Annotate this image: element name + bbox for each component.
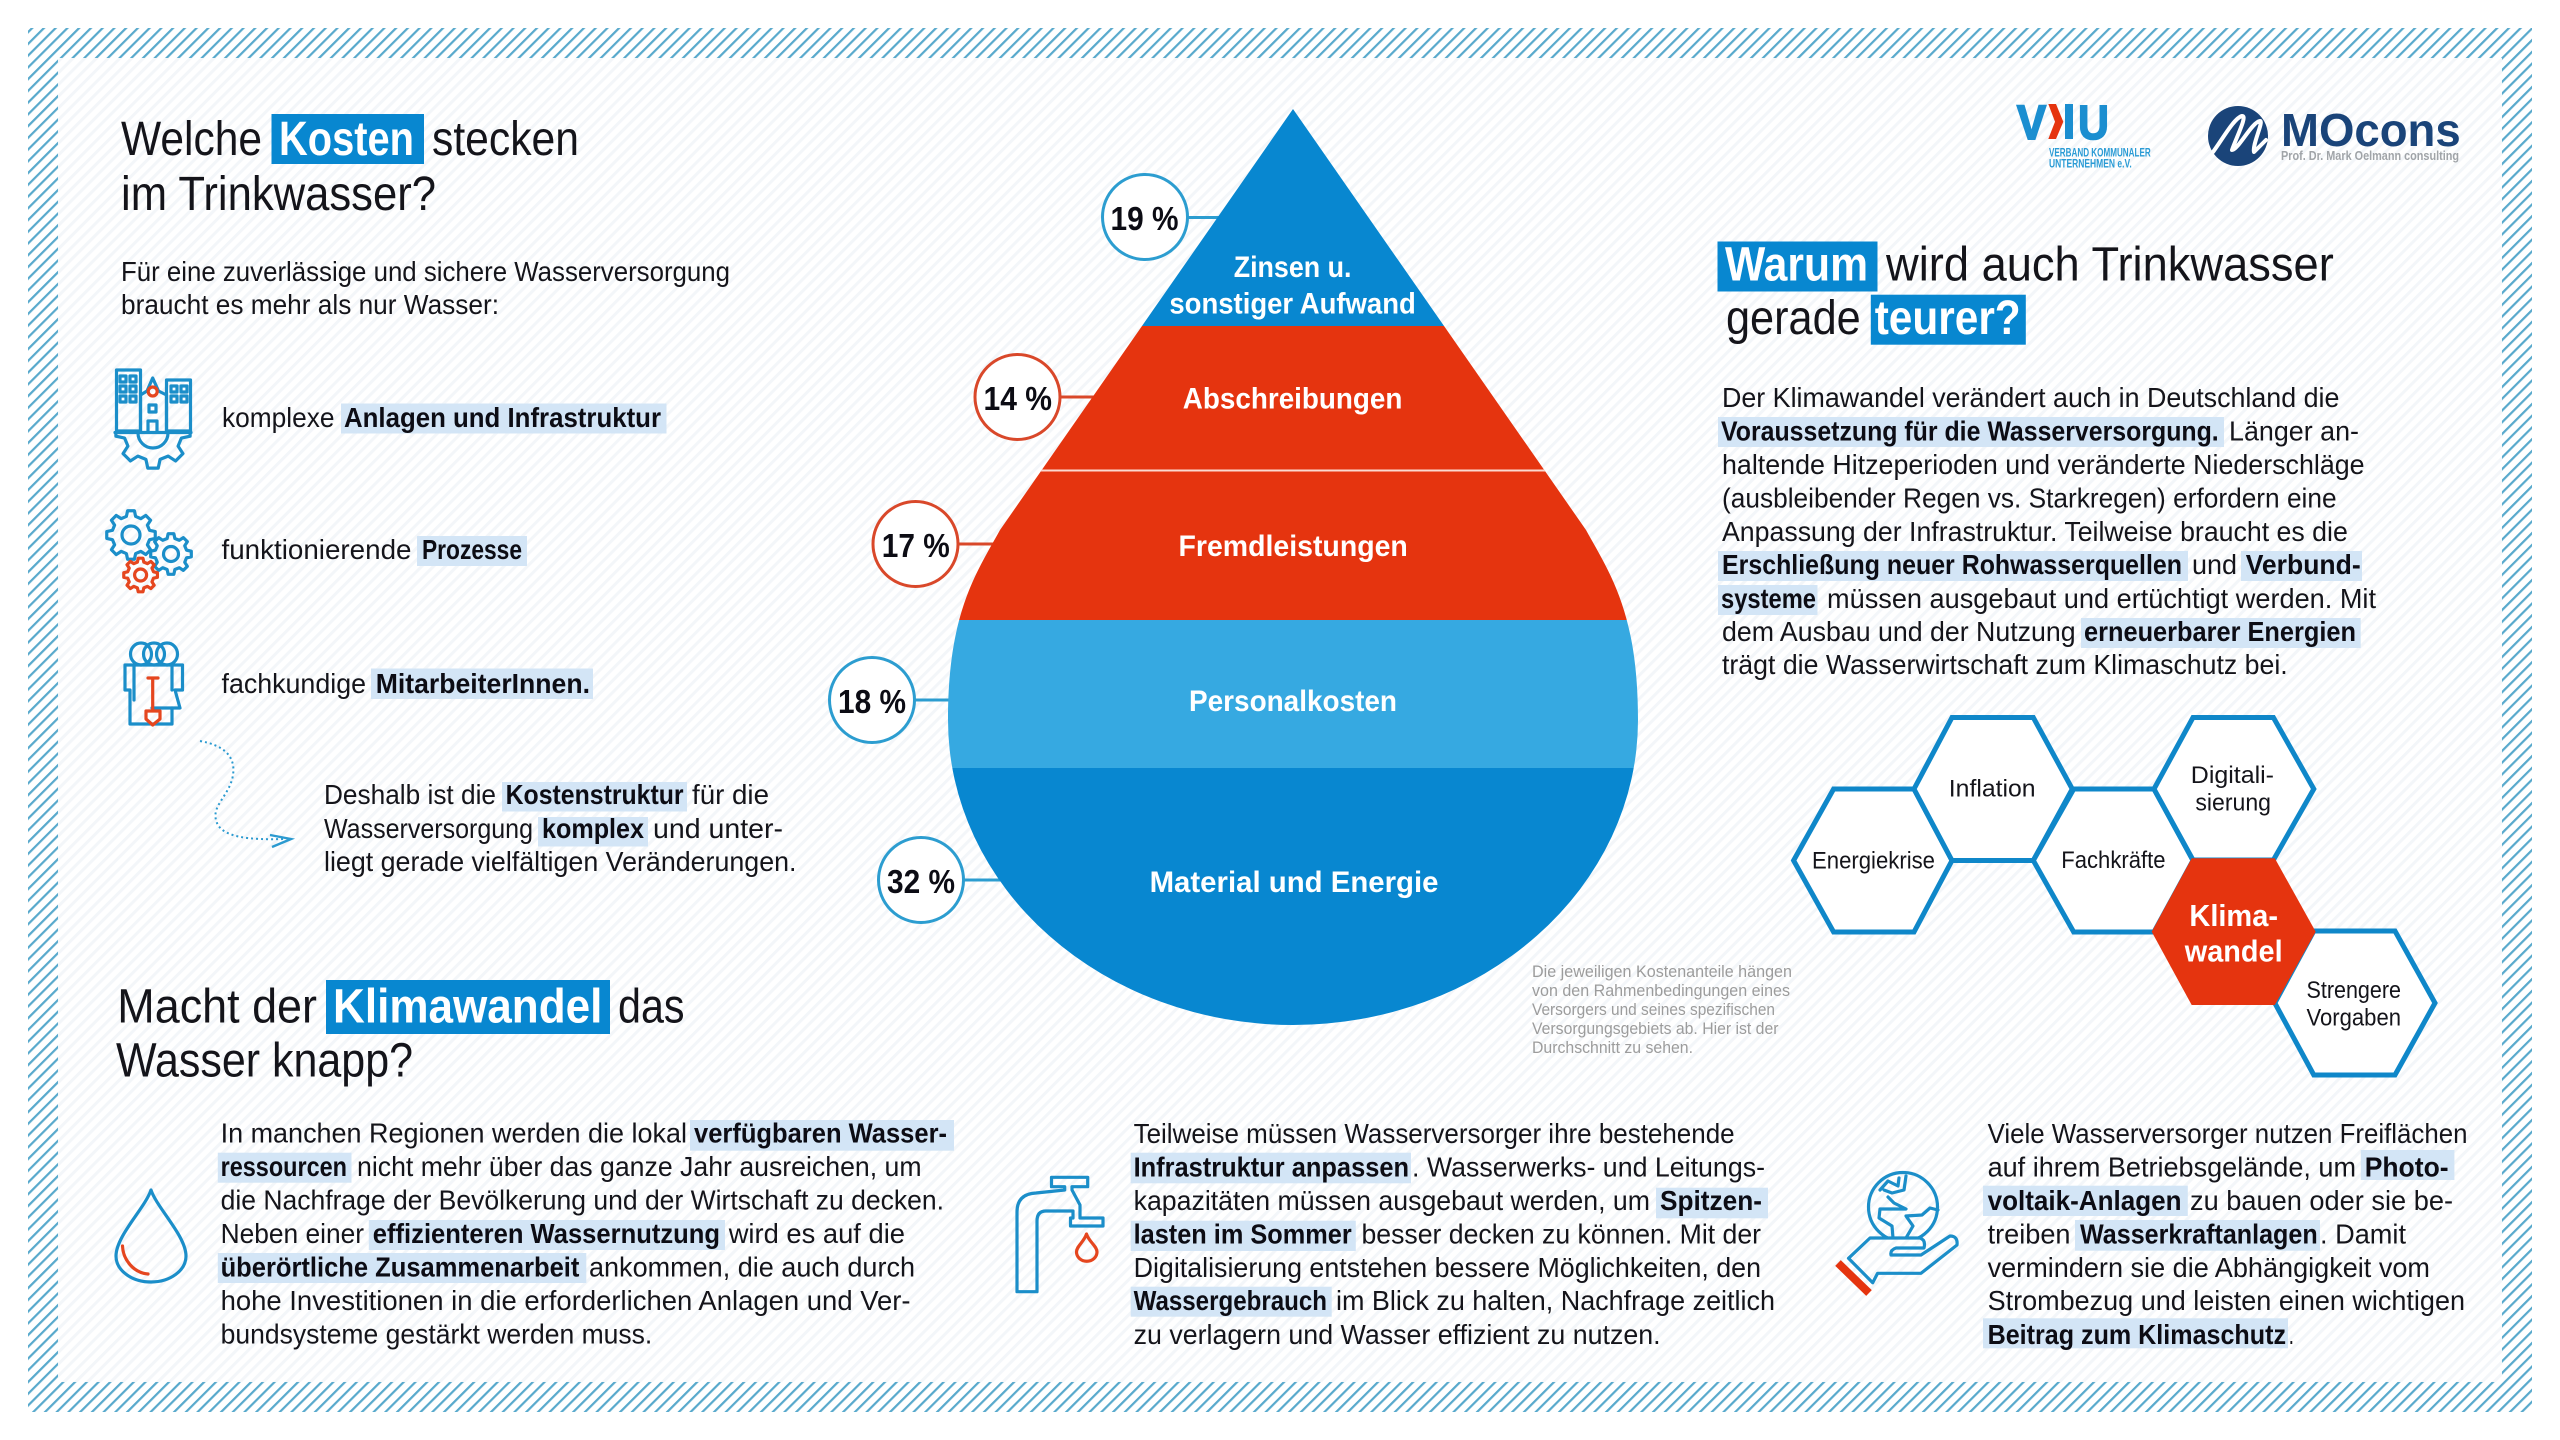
logo: VKU: VERBAND KOMMUNALER <box>2049 148 2151 160</box>
text: Infrastruktur anpassen: kapazitäten müssen ausgebaut werden, um <box>1134 1185 1650 1216</box>
text: regionale Wasserressourcen: bundsysteme gestärkt werden muss. <box>221 1318 652 1350</box>
text: Infrastruktur anpassen: Infrastruktur anpassen <box>1134 1152 1409 1182</box>
text: regionale Wasserressourcen: nicht mehr über das ganze Jahr ausreichen, um <box>357 1151 922 1182</box>
text: Deshalb ist die Kostenstruktur: und unter- <box>653 813 783 844</box>
text: regionale Wasserressourcen: verfügbaren Wasser- <box>694 1118 947 1149</box>
footnote: von den Rahmenbedingungen eines <box>1532 982 1790 1000</box>
icon: water tap <box>1017 1177 1103 1292</box>
text: Freiflächen und Photovoltaik: Photo- <box>2365 1152 2449 1182</box>
text: Klimawandel in Deutschland: trägt die Wasserwirtschaft zum Klimaschutz bei. <box>1722 649 2288 680</box>
text: Freiflächen und Photovoltaik: Viele Wasserversorger nutzen Freiflächen <box>1988 1118 2468 1149</box>
title: Welche Kosten stecken: Welche <box>121 113 262 166</box>
connector lines <box>915 218 1230 880</box>
footnote <box>1532 963 1792 1057</box>
logo: VKU: U <box>2078 97 2109 150</box>
percentage: 18: 18 % <box>838 683 906 720</box>
text: Klimawandel in Deutschland: und <box>2192 549 2237 580</box>
title: Macht der Klimawandel das Wasser knapp: Klimawandel <box>333 981 602 1034</box>
text: Infrastruktur anpassen: zu verlagern und Wasser effizient zu nutzen. <box>1134 1319 1661 1350</box>
icon: buildings on gear <box>115 370 191 468</box>
title: Macht der Klimawandel das Wasser knapp: Wasser knapp? <box>116 1035 413 1088</box>
text: Klimawandel in Deutschland: haltende Hitzeperioden und veränderte Niederschläge <box>1722 449 2365 480</box>
hexagon: Energiekrise: Energiekrise <box>1812 847 1935 874</box>
text: regionale Wasserressourcen: ressourcen <box>221 1151 347 1182</box>
text: Deshalb ist die Kostenstruktur: Deshalb ist die <box>324 779 496 810</box>
hexagon: Inflation <box>1914 718 2072 860</box>
text: Klimawandel in Deutschland: Erschließung neuer Rohwasserquellen <box>1722 549 2182 580</box>
hexagon: Digitalisierung <box>2154 718 2314 860</box>
text: Deshalb ist die Kostenstruktur: Wasserversorgung <box>324 813 533 844</box>
text: regionale Wasserressourcen: Neben einer <box>221 1218 364 1249</box>
percentage: 19 <box>1102 174 1188 260</box>
label: Zinsen: sonstiger Aufwand <box>1169 288 1416 320</box>
title: Warum wird auch Trinkwasser: teurer? <box>1875 292 2021 345</box>
footnote: Versorgungsgebiets ab. Hier ist der <box>1532 1020 1779 1038</box>
text: Freiflächen und Photovoltaik: Wasserkraftanlagen <box>2080 1218 2318 1250</box>
percentage: 17 <box>873 502 958 586</box>
hexagon: Digitalisierung: sierung <box>2195 790 2271 817</box>
text: Freiflächen und Photovoltaik: auf ihrem Betriebsgelände, um <box>1988 1152 2356 1182</box>
title: Welche Kosten stecken: im Trinkwasser? <box>121 168 436 221</box>
item text: Anlagen und Infrastruktur: Anlagen und Infrastruktur <box>344 402 661 433</box>
text: regionale Wasserressourcen: In manchen Regionen werden die lokal <box>221 1118 687 1149</box>
text: Freiflächen und Photovoltaik: vermindern sie die Abhängigkeit vom <box>1988 1252 2430 1283</box>
text: Freiflächen und Photovoltaik: treiben <box>1988 1218 2070 1250</box>
label: Material und Energie: Material und Energie <box>1150 866 1438 899</box>
percentage: 19: 19 % <box>1110 200 1178 237</box>
text: Klimawandel in Deutschland: Länger an- <box>2229 416 2359 446</box>
text: regionale Wasserressourcen: überörtliche Zusammenarbeit <box>221 1252 579 1282</box>
hexagon: Klimawandel <box>2152 858 2316 1005</box>
title: Warum wird auch Trinkwasser <box>1718 238 2334 345</box>
text: regionale Wasserressourcen: wird es auf die <box>728 1218 905 1249</box>
text: Infrastruktur anpassen: im Blick zu halten, Nachfrage zeitlich <box>1336 1285 1775 1316</box>
arrow: dotted curve <box>200 741 291 847</box>
text: Deshalb ist die Kostenstruktur <box>324 779 796 877</box>
footnote: Die jeweiligen Kostenanteile hängen <box>1532 963 1792 981</box>
icon: gears <box>107 511 191 592</box>
title: Welche Kosten stecken <box>121 113 579 221</box>
intro text <box>121 256 730 320</box>
item text: Anlagen und Infrastruktur: komplexe <box>222 402 334 433</box>
intro text: braucht es mehr als nur Wasser: <box>121 289 499 320</box>
text: Infrastruktur anpassen: besser decken zu können. Mit der <box>1362 1218 1761 1250</box>
text: Klimawandel in Deutschland: müssen ausgebaut und ertüchtigt werden. Mit <box>1827 583 2376 614</box>
percentage: 32 <box>878 838 964 922</box>
title: Welche Kosten stecken: stecken <box>432 113 579 166</box>
hexagon: Klimawandel: wandel <box>2184 934 2283 969</box>
icon: globe in hand <box>1838 1172 1957 1293</box>
text: Freiflächen und Photovoltaik: voltaik-Anlagen <box>1988 1185 2182 1216</box>
item text: Prozesse: Prozesse <box>422 534 522 565</box>
intro text: Für eine zuverlässige und sichere Wasserversorgung <box>121 256 730 287</box>
icon: water drop <box>116 1190 186 1282</box>
percentage: 32: 32 % <box>887 863 955 900</box>
text: regionale Wasserressourcen: ankommen, die auch durch <box>589 1252 915 1282</box>
hexagon: Fachkräfte <box>2033 789 2193 932</box>
label: Zinsen <box>1169 251 1416 320</box>
percentage: 14: 14 % <box>984 380 1052 417</box>
item text: MitarbeiterInnen: fachkundige <box>222 668 366 699</box>
text: Deshalb ist die Kostenstruktur: komplex <box>542 813 644 844</box>
text: regionale Wasserressourcen: effizienteren Wassernutzung <box>373 1218 720 1249</box>
text: Infrastruktur anpassen: Teilweise müssen Wasserversorger ihre bestehende <box>1134 1118 1735 1149</box>
text: Klimawandel in Deutschland: Anpassung der Infrastruktur. Teilweise braucht es die <box>1722 516 2348 547</box>
hexagon: Inflation: Inflation <box>1949 776 2036 803</box>
label: Personalkosten: Personalkosten <box>1189 685 1397 718</box>
item text: Anlagen und Infrastruktur <box>222 402 666 434</box>
label: Zinsen: Zinsen u. <box>1234 251 1352 284</box>
title: Warum wird auch Trinkwasser: wird auch Trinkwasser <box>1885 238 2334 292</box>
text: Klimawandel in Deutschland: (ausbleibender Regen vs. Starkregen) erfordern eine <box>1722 482 2337 514</box>
text: Infrastruktur anpassen: Wassergebrauch <box>1134 1285 1327 1316</box>
text: regionale Wasserressourcen: hohe Investitionen in die erforderlichen Anlagen und Ver- <box>221 1285 911 1316</box>
icon: staff with shovel <box>125 643 182 725</box>
hexagon: Klimawandel: Klima- <box>2189 898 2278 933</box>
text: Freiflächen und Photovoltaik: . <box>2289 1319 2294 1350</box>
item text: MitarbeiterInnen: MitarbeiterInnen. <box>376 668 590 699</box>
text: Infrastruktur anpassen: lasten im Sommer <box>1134 1218 1352 1250</box>
logo: VKU <box>2017 97 2151 171</box>
text: regionale Wasserressourcen <box>218 1118 954 1350</box>
item text: Prozesse: funktionierende <box>222 534 412 565</box>
text: Freiflächen und Photovoltaik: Beitrag zum Klimaschutz <box>1988 1319 2286 1350</box>
text: Deshalb ist die Kostenstruktur: Kostenstruktur <box>506 779 684 810</box>
text: Freiflächen und Photovoltaik: . Damit <box>2320 1218 2406 1250</box>
text: Klimawandel in Deutschland <box>1718 382 2376 680</box>
hexagon: Strengere Vorgaben: Strengere <box>2306 977 2401 1004</box>
label: Abschreibungen: Abschreibungen <box>1183 382 1402 416</box>
label: Fremdleistungen: Fremdleistungen <box>1178 530 1408 563</box>
hexagon: Energiekrise <box>1794 789 1952 932</box>
hexagon: Strengere Vorgaben: Vorgaben <box>2306 1005 2401 1032</box>
hexagon: Strengere Vorgaben <box>2275 931 2435 1075</box>
item text: Prozesse <box>222 534 527 566</box>
title: Macht der Klimawandel das Wasser knapp <box>116 980 684 1088</box>
text: Deshalb ist die Kostenstruktur: für die <box>692 779 769 810</box>
text: Freiflächen und Photovoltaik <box>1983 1118 2468 1350</box>
hexagon: Digitalisierung: Digitali- <box>2191 762 2274 789</box>
logo: MOcons <box>2208 104 2461 166</box>
text: Infrastruktur anpassen: . Wasserwerks- und Leitungs- <box>1412 1152 1765 1182</box>
logo: VKU: V <box>2017 97 2046 150</box>
text: Infrastruktur anpassen: Digitalisierung entstehen bessere Möglichkeiten, den <box>1134 1252 1761 1283</box>
text: Freiflächen und Photovoltaik: zu bauen oder sie be- <box>2190 1185 2453 1216</box>
percentage: 18 <box>830 658 914 742</box>
text: regionale Wasserressourcen: die Nachfrage der Bevölkerung und der Wirtschaft zu decken. <box>221 1184 944 1216</box>
title: Macht der Klimawandel das Wasser knapp: Macht der <box>117 981 317 1034</box>
title: Macht der Klimawandel das Wasser knapp: das <box>618 981 684 1034</box>
title: Warum wird auch Trinkwasser: Warum <box>1725 238 1868 292</box>
text: Freiflächen und Photovoltaik: Strombezug und leisten einen wichtigen <box>1988 1285 2465 1316</box>
logo: MOcons: Prof. Dr. Mark Oelmann consulting <box>2281 149 2459 163</box>
text: Klimawandel in Deutschland: Voraussetzung für die Wasserversorgung. <box>1721 416 2219 446</box>
text: Infrastruktur anpassen <box>1131 1118 1775 1350</box>
chart: water drop cost structure <box>940 100 1650 1028</box>
logo: MOcons: MOcons <box>2281 104 2461 156</box>
footnote: Durchschnitt zu sehen. <box>1532 1039 1693 1057</box>
text: Klimawandel in Deutschland: systeme <box>1721 583 1816 614</box>
text: Klimawandel in Deutschland: Verbund- <box>2246 549 2361 580</box>
hexagon diagram: drivers of cost <box>1794 718 2435 1075</box>
text: Klimawandel in Deutschland: erneuerbarer Energien <box>2084 616 2356 647</box>
text: Klimawandel in Deutschland: Der Klimawandel verändert auch in Deutschland die <box>1722 382 2339 413</box>
title: Warum wird auch Trinkwasser: gerade <box>1726 292 1861 345</box>
text: Deshalb ist die Kostenstruktur: liegt gerade vielfältigen Veränderungen. <box>324 846 796 877</box>
footnote: Versorgers und seines spezifischen <box>1532 1001 1775 1019</box>
percentage: 17: 17 % <box>882 527 950 564</box>
text: Klimawandel in Deutschland: dem Ausbau und der Nutzung <box>1722 616 2076 647</box>
logo: VKU: UNTERNEHMEN e.V. <box>2049 159 2132 171</box>
title: Welche Kosten stecken: Kosten <box>279 113 414 166</box>
hexagon: Fachkräfte: Fachkräfte <box>2061 847 2166 874</box>
text: Infrastruktur anpassen: Spitzen- <box>1660 1185 1762 1216</box>
item text: MitarbeiterInnen <box>222 668 593 699</box>
percentage: 14 <box>975 354 1060 440</box>
